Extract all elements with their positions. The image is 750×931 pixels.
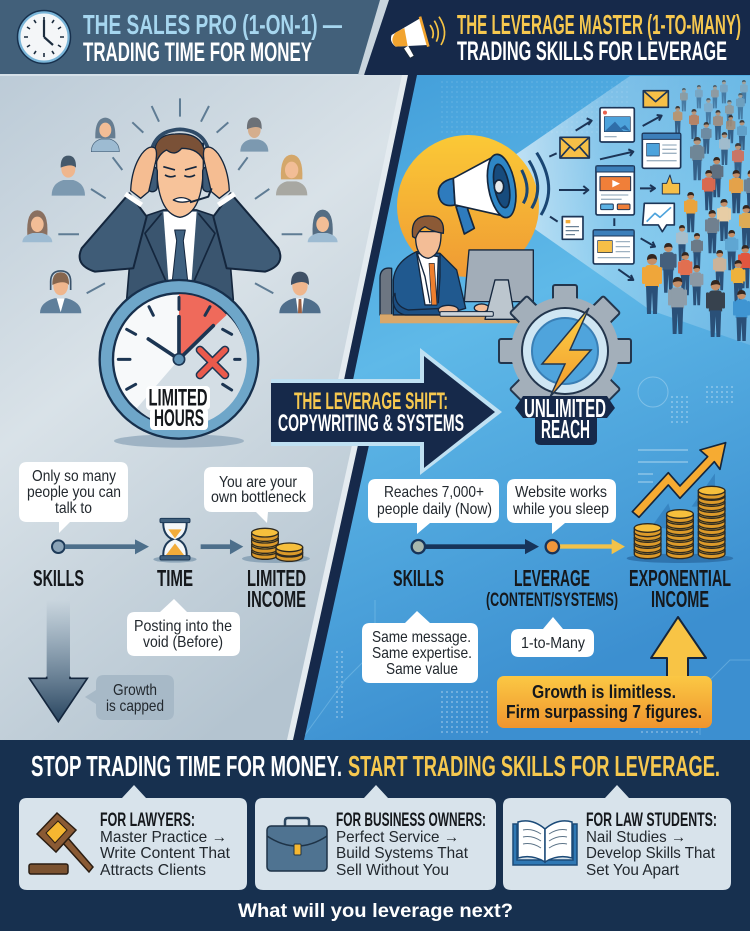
- bubble: only so many: Only so many: [32, 468, 116, 485]
- person: woman top left: [91, 118, 119, 152]
- label: leverage: [486, 565, 618, 611]
- label: limited income: [247, 565, 306, 612]
- person: woman far right: [308, 210, 338, 242]
- card: for law students: Nail Studies →: [586, 829, 686, 846]
- icon: envelope large: [560, 137, 589, 158]
- label: exponential income: [629, 565, 731, 612]
- world map texture: [440, 80, 630, 135]
- bubble: same message: Same expertise.: [372, 645, 472, 662]
- bubble: same message: [362, 611, 478, 683]
- callout: growth is limitless: Firm surpassing 7 figures.: [506, 702, 702, 722]
- icon: wall clock: [18, 10, 70, 64]
- bubble: growth is capped: Growth: [113, 682, 157, 699]
- label: limited income: LIMITED: [247, 565, 306, 591]
- card: for law students: Develop Skills That: [586, 845, 716, 862]
- bubble: posting into void: void (Before): [143, 634, 223, 651]
- card: for law students: Set You Apart: [586, 862, 680, 879]
- bubble: website works: Website works: [515, 484, 607, 501]
- icon: yellow browser: [593, 230, 634, 264]
- icon: thumbs up: [662, 175, 680, 194]
- label: unlimited reach: UNLIMITED: [524, 393, 606, 423]
- bubble: website works: [507, 479, 616, 534]
- circuit texture: [305, 600, 750, 735]
- card: for lawyers: Attracts Clients: [100, 862, 206, 879]
- monitor: [464, 250, 533, 302]
- divider: [287, 75, 417, 740]
- bubble: growth is capped: is capped: [106, 698, 164, 715]
- bubble: only so many: people you can: [27, 484, 121, 501]
- label: unlimited reach: [515, 393, 615, 445]
- card: for lawyers: [19, 785, 247, 890]
- label: skills: SKILLS: [33, 565, 84, 591]
- person: man left: [52, 156, 85, 196]
- decoration: faint globes and bars: [638, 377, 733, 483]
- bubble: reaches 7000: people daily (Now): [377, 501, 492, 518]
- icon: briefcase: [267, 818, 327, 871]
- footer: [0, 740, 750, 931]
- card: for business owners: [255, 785, 496, 890]
- icon: image card: [600, 108, 634, 142]
- icon: header megaphone: [391, 17, 445, 58]
- callout: growth is limitless: Growth is limitless.: [532, 682, 676, 702]
- arrow: the leverage shift: COPYWRITING & SYSTEMS: [278, 410, 464, 437]
- bubble: only so many: talk to: [55, 500, 92, 517]
- bubble: 1-to-many: [511, 617, 594, 657]
- bubble: same message: Same message.: [372, 629, 471, 646]
- arrow: growth capped down arrow: [29, 600, 87, 722]
- person: suited man: [279, 272, 321, 313]
- arrow: the leverage shift: [271, 348, 502, 475]
- arrows: content flow: [549, 115, 662, 280]
- heading: leverage master: [457, 9, 741, 66]
- card: for lawyers: Master Practice →: [100, 829, 227, 846]
- bubble: posting into void: [127, 599, 240, 656]
- icon: gavel: [29, 813, 93, 874]
- clock: grey used wedge: [137, 314, 247, 426]
- flow: left arrows and nodes: [29, 518, 310, 722]
- card: for lawyers: Write Content That: [100, 845, 231, 862]
- header: left: [0, 0, 386, 76]
- bubble: posting into void: Posting into the: [134, 618, 232, 635]
- bubble: 1-to-many: 1-to-Many: [521, 635, 585, 652]
- arrow: yellow up arrow: [651, 617, 706, 680]
- bubble: bottleneck: own bottleneck: [211, 489, 307, 506]
- illustration: sun disc: [397, 135, 539, 277]
- bubble: reaches 7000: Reaches 7,000+: [384, 484, 484, 501]
- icon: browser card: [642, 133, 681, 168]
- label: skills right: SKILLS: [393, 565, 444, 591]
- icon: doc: [562, 217, 583, 239]
- callout: growth is limitless: [497, 676, 712, 728]
- label: leverage: (CONTENT/SYSTEMS): [486, 590, 618, 611]
- radiating stress lines: [58, 98, 302, 293]
- icon: lightning bolt: [542, 308, 591, 397]
- bubble: only so many: [19, 462, 128, 533]
- card: for business owners: Build Systems That: [336, 845, 469, 862]
- heading: sales pro: THE SALES PRO (1-ON-1) —: [83, 9, 342, 40]
- illustration: desk worker: [380, 216, 533, 323]
- label: limited hours: LIMITED: [148, 384, 208, 412]
- body: [393, 252, 466, 315]
- label: limited hours: [146, 384, 210, 432]
- label: time: TIME: [157, 565, 193, 591]
- header: right: [358, 0, 750, 75]
- bubble: bottleneck: [204, 467, 313, 523]
- illustration: megaphone: [438, 152, 549, 234]
- flow: right arrows and nodes: [412, 539, 625, 554]
- heading: sales pro: TRADING TIME FOR MONEY: [83, 37, 312, 67]
- icon: open book: [513, 821, 577, 865]
- panel: left background: [0, 75, 420, 740]
- illustration: content flow arrows and cards: [549, 91, 681, 280]
- bubble: reaches 7000: [368, 479, 499, 534]
- label: limited income: INCOME: [247, 586, 306, 612]
- heading: call to action: STOP TRADING TIME FOR MONEY.: [31, 751, 342, 783]
- illustration: unlimited reach gear: [499, 285, 631, 445]
- illustration: broadcast beam: [512, 76, 750, 345]
- label: leverage: LEVERAGE: [514, 565, 590, 591]
- panel: right background: [297, 75, 750, 740]
- card: for business owners: Perfect Service →: [336, 829, 459, 846]
- icon: hourglass: [153, 518, 197, 563]
- label: exponential income: INCOME: [651, 586, 709, 612]
- closing question: What will you leverage next?: [238, 901, 513, 922]
- label: unlimited reach: REACH: [541, 414, 590, 444]
- arrow: the leverage shift: THE LEVERAGE SHIFT:: [294, 388, 448, 415]
- bubble: website works: while you sleep: [512, 501, 609, 518]
- person: headset man: [40, 271, 81, 313]
- icon: envelope small: [643, 91, 668, 107]
- illustration: crowd: [642, 80, 750, 341]
- chart: exponential coin stacks and arrow: [627, 443, 733, 563]
- card: for business owners: Sell Without You: [336, 862, 449, 879]
- heading: sales pro: [83, 9, 342, 67]
- illustration: limited hours clock: [100, 280, 258, 448]
- icon: video card: [596, 166, 634, 215]
- head: [416, 232, 441, 258]
- illustration: stressed salesman: [80, 129, 280, 300]
- bubble: same message: Same value: [386, 661, 458, 678]
- card: for business owners: FOR BUSINESS OWNERS:: [336, 810, 486, 831]
- card: for lawyers: FOR LAWYERS:: [100, 810, 195, 831]
- person: woman far left: [22, 210, 52, 242]
- icon: small coin stacks: [242, 528, 310, 563]
- card: for law students: [503, 785, 731, 890]
- people: surrounding contacts: [22, 117, 338, 313]
- bubble: growth is capped: [85, 675, 174, 720]
- clock: red x: [200, 350, 225, 375]
- person: blonde woman: [276, 155, 307, 195]
- person: man top right: [240, 117, 268, 152]
- icon: chart bubble: [643, 203, 674, 232]
- label: limited hours: HOURS: [154, 405, 204, 432]
- clock: red sector: [179, 294, 227, 359]
- bubble: bottleneck: You are your: [219, 474, 298, 491]
